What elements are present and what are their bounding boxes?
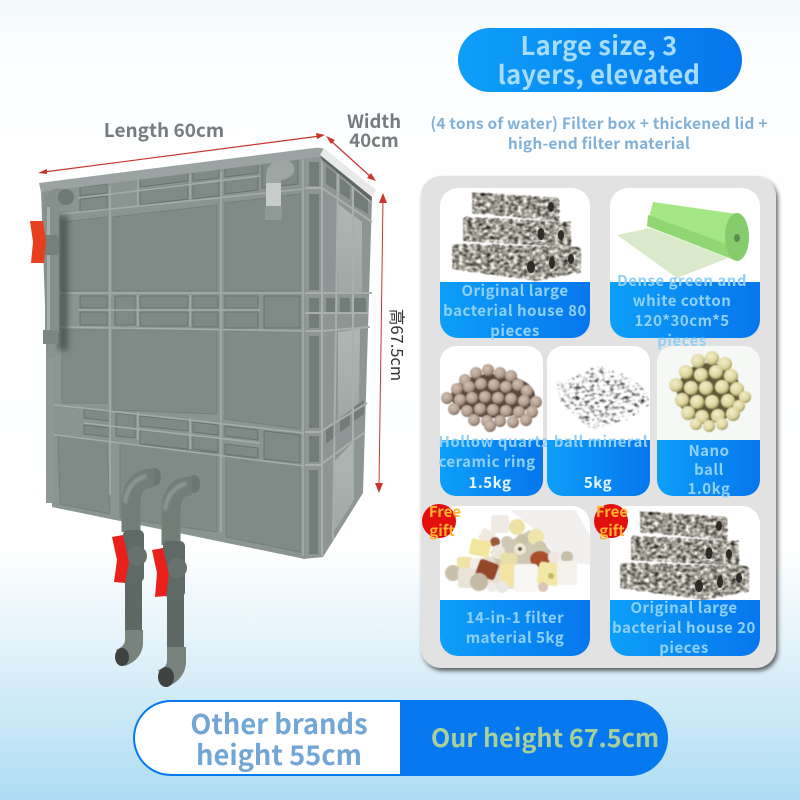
product photo: three-layer filter box (30, 148, 376, 687)
caption: ball mineral: ball mineral (554, 431, 648, 452)
card: 14-in-1 filter material (440, 506, 590, 656)
arrow: width (326, 136, 376, 181)
lid (39, 148, 326, 192)
panel: filter materials (421, 176, 776, 668)
box front face (41, 155, 305, 559)
caption: ceramic ring: 1.5kg (469, 472, 511, 493)
our height text: Our height 67.5cm (431, 719, 659, 755)
caption: nano ball: Nano (688, 440, 730, 461)
photo: white rings (556, 366, 650, 428)
badge: free gift 1 (422, 501, 461, 541)
title text: Large size, 3 (521, 26, 677, 63)
card: bacterial house 20 (610, 506, 760, 656)
arrow: length (38, 133, 325, 174)
other brands text: height 55cm (196, 733, 362, 773)
box right side face (303, 157, 372, 559)
caption: cotton: pieces (657, 330, 707, 351)
caption: bacterial house 20: bacterial house 20 (612, 617, 756, 638)
handling-band recesses (80, 159, 300, 463)
caption: bacterial house 80: bacterial house 80 (443, 300, 587, 321)
caption: 14-in-1: material 5kg (466, 627, 564, 648)
badge: free gift 1: Free (429, 501, 461, 522)
card: nano ball (657, 346, 760, 496)
badge: free gift 2: gift (599, 520, 625, 541)
card: ceramic ring (440, 346, 543, 496)
subtitle: (4 tons of water) Filter box + thickened lid + (430, 112, 768, 134)
title pill (458, 26, 742, 92)
height comparison pill (133, 700, 668, 776)
label: length: Length 60cm (104, 116, 224, 143)
caption: ceramic ring: Hollow quartz (439, 431, 549, 452)
caption: bacterial house 80: Original large (461, 280, 569, 301)
caption: bacterial house 80: pieces (490, 320, 540, 341)
caption: ceramic ring: ceramic ring (438, 451, 536, 472)
caption: cotton: 120*30cm*5 (634, 310, 730, 331)
upper left pipe and valve (30, 188, 74, 503)
upper right fitting (265, 160, 294, 220)
caption: cotton: Dense green and (617, 270, 747, 291)
caption: nano ball: 1.0kg (688, 478, 730, 499)
label: width: 40cm (349, 127, 399, 153)
pipe shadow (58, 215, 68, 350)
photo: bacterial house logs (452, 192, 581, 281)
photo: cotton roll (617, 202, 749, 278)
card: ball mineral (547, 346, 650, 496)
badge: free gift 2: Free (596, 501, 628, 522)
caption: bacterial house 20: Original large (630, 597, 738, 618)
label: width: Width (347, 108, 401, 134)
lower drain pipe B (152, 475, 200, 687)
card: green and white cotton (610, 188, 760, 338)
caption: bacterial house 20: pieces (659, 637, 709, 658)
title text: layers, elevated (498, 55, 700, 92)
caption: 14-in-1: 14-in-1 filter (466, 607, 564, 628)
photo: brown balls (441, 364, 542, 432)
arrow: height (375, 193, 387, 493)
photo: mixed filter media (445, 510, 590, 593)
lower drain pipe A (112, 468, 161, 666)
label: height: 高67.5cm (386, 309, 410, 381)
photo: bacterial house logs (620, 511, 749, 600)
badge: free gift 2 (594, 501, 628, 541)
card: bacterial house 80 (440, 188, 590, 338)
rails and ribs (47, 160, 304, 556)
caption: ball mineral: 5kg (584, 472, 612, 493)
badge: free gift 1: gift (429, 520, 455, 541)
photo: yellow balls (669, 351, 751, 432)
subtitle: high-end filter material (508, 132, 690, 154)
caption: nano ball: ball (694, 459, 724, 480)
caption: cotton: white cotton (633, 290, 731, 311)
other brands text: Other brands (190, 702, 368, 742)
